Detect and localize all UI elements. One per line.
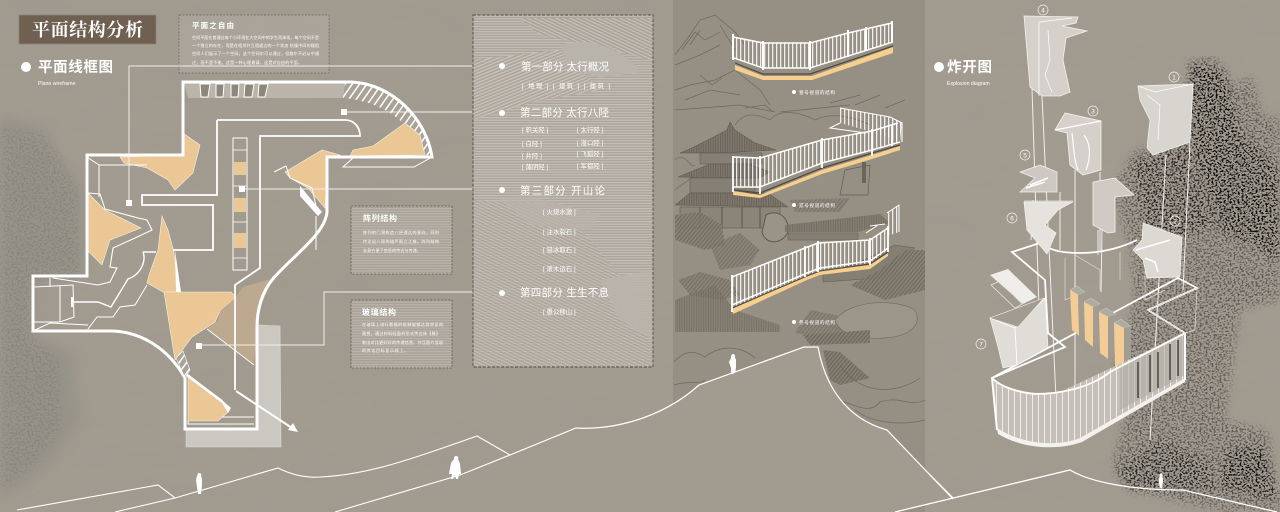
text box: plan freedom: 空间平面在首通过每个小环境在大空间中的学生而体现，每个空间不是 — [192, 34, 319, 40]
glass block shadow — [186, 325, 281, 447]
fragment extra — [1093, 178, 1134, 233]
brown translucent zone — [207, 280, 272, 365]
part one: 第一部分 太行概况 — [521, 60, 610, 73]
part four: [ 愚公移山 ] — [543, 307, 576, 316]
part two: [ 飞狐陉 ] — [577, 149, 603, 158]
fragment 4 — [1024, 16, 1087, 96]
text box: plan freedom: 过，而不是不能。这是一种心理邀请，这是对自由的平面。 — [192, 59, 302, 65]
heading: plane wireframe: 平面线框图 — [38, 58, 113, 76]
ground mountain and terrain lines — [17, 347, 1277, 512]
floor plan wireframe — [33, 82, 432, 447]
fragment 7 — [990, 298, 1048, 368]
outer wall — [33, 82, 432, 429]
title — [19, 15, 156, 44]
part two: [ 太行陉 ] — [577, 125, 603, 134]
stairs — [990, 269, 1037, 308]
numbered markers — [976, 5, 1180, 349]
explosion diagram — [976, 5, 1197, 447]
leader lines and markers — [126, 66, 500, 349]
part four: 第四部分 生生不息 — [520, 286, 609, 299]
part one: [ 地理 ] [ 建筑 ] [ 建筑 ] — [522, 81, 610, 90]
heading: plane wireframe — [21, 58, 113, 87]
sketch: trees and rocks — [675, 162, 870, 300]
text box: glass structure: 观赏。通过材料轻盈的形式传达体【脉】 — [362, 330, 440, 336]
top band with windows — [184, 82, 431, 156]
explosion diagram: 7 — [979, 341, 983, 348]
part two: [ 蒲阴陉 ] — [522, 162, 548, 171]
figures — [196, 473, 202, 494]
part two: 第二部分 太行八陉 — [520, 106, 610, 119]
array column — [233, 138, 247, 270]
fragment 6 — [1024, 201, 1073, 254]
text box: glass structure: 的传达目标显示线上。 — [362, 347, 408, 353]
caption three: 叁号视道的结构 — [799, 319, 835, 326]
explosion diagram: 1 — [1172, 74, 1176, 81]
text box: plan freedom: 空间人们展示了一个空间。这个空间尔可以通过，但路尔不必从中通 — [192, 50, 319, 56]
sketch: lower pavilion — [674, 214, 925, 470]
explosion diagram: 2 — [1173, 218, 1177, 225]
caption one — [792, 89, 835, 96]
heading: explosion diagram: 炸开图 — [947, 58, 992, 76]
heading: explosion diagram: Explosion diagram — [947, 81, 990, 87]
orange columns — [1070, 286, 1131, 367]
background ink mountain right — [1110, 56, 1280, 512]
connector lines — [1031, 88, 1190, 440]
explosion diagram: 6 — [1010, 215, 1014, 222]
caption two: 贰号视道的结构 — [799, 202, 835, 209]
sketch: pagoda — [675, 122, 788, 228]
text box: glass structure: 在玻璃上进行裂痕的绘制能够达到突显的 — [362, 321, 443, 327]
fragment 1 — [1138, 84, 1193, 155]
railing three — [732, 205, 899, 314]
base wall front — [992, 333, 1185, 447]
part three: [ 错冰取石 ] — [543, 245, 576, 254]
text box: plan freedom: 平面之自由 — [192, 20, 234, 30]
text box: array structure: 本身方便了信息的传达与传递。 — [363, 247, 421, 253]
explosion diagram: 3 — [1091, 108, 1095, 115]
part two: [ 井陉 ] — [522, 151, 542, 160]
part two: [ 滏口陉 ] — [577, 138, 603, 147]
orange zones — [87, 123, 425, 421]
railing one — [733, 21, 893, 80]
panel: contents list — [473, 15, 653, 367]
heading: explosion diagram — [934, 58, 992, 87]
text box: glass structure: 玻璃结构 — [362, 307, 396, 317]
inner walls — [34, 120, 432, 390]
part four — [499, 286, 609, 316]
text box: glass structure: 能出对比更好好的传递信息。并且图片显现 — [362, 339, 443, 345]
heading: plane wireframe: Plane wireframe — [38, 81, 76, 87]
arrow — [236, 391, 298, 432]
fragment 5 — [1020, 165, 1057, 192]
text box: glass structure — [351, 300, 452, 368]
sketch: distant mountains — [675, 15, 905, 190]
caption three — [792, 319, 835, 326]
explosion diagram: 5 — [1023, 152, 1027, 159]
part three: [ 注水裂石 ] — [543, 227, 576, 236]
text box: plan freedom — [179, 15, 329, 73]
part two: [ 白陉 ] — [522, 139, 542, 148]
text box: array structure — [351, 206, 452, 274]
text box: array structure: 阵列结构 — [363, 213, 397, 223]
base wall outline — [992, 240, 1197, 394]
explosion diagram: 4 — [1041, 7, 1045, 14]
part one — [499, 60, 610, 90]
railing two — [733, 108, 902, 198]
part three: 第三部分 开山论 — [520, 184, 606, 197]
part three — [499, 184, 606, 273]
background ink mountain left — [0, 115, 86, 500]
text box: plan freedom: 一个独立的存在，而是在相邻共互相通达的一个状态 枯燥中间的隔阻 — [192, 42, 319, 48]
text box: array structure: 传达出八陉的雄严雨立之感。阵列结构 — [363, 238, 439, 244]
middle panel with sketched landscape — [673, 0, 925, 512]
back wall sketch — [1065, 252, 1197, 333]
part two — [499, 106, 610, 171]
fragment 2 — [1133, 223, 1182, 278]
text box: array structure: 阵列的门洞构造八陉通达的意向，同时 — [363, 229, 439, 235]
part three: [ 火烧水激 ] — [543, 207, 576, 216]
caption two — [792, 202, 835, 209]
part two: [ 军都陉 ] — [577, 161, 603, 170]
small stair details — [175, 186, 322, 413]
part three: [ 滚木运石 ] — [543, 264, 576, 273]
caption one: 壹号视道的结构 — [799, 89, 835, 96]
title: 平面结构分析 — [32, 19, 143, 40]
fragment 3 — [1055, 113, 1101, 175]
part two: [ 轵关陉 ] — [522, 125, 548, 134]
